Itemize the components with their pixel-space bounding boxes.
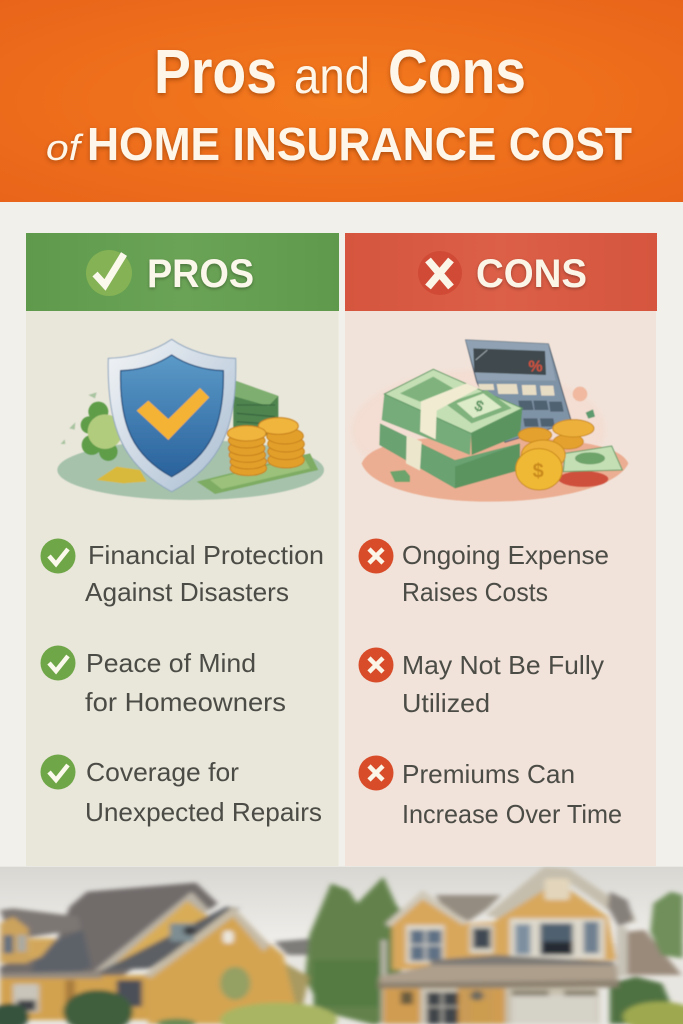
item text: Ongoing Expense — [402, 540, 609, 570]
title: HOME INSURANCE COST — [87, 118, 632, 170]
icon: check — [40, 646, 76, 680]
title: Pros — [154, 38, 277, 107]
icon: pros check badge — [86, 250, 132, 296]
icon: x — [358, 648, 394, 682]
cons heading: CONS — [476, 252, 587, 296]
panel: cons — [345, 233, 657, 866]
pros item 2 — [40, 646, 286, 717]
illustration: money and calculator — [352, 340, 628, 502]
item text: Utilized — [402, 688, 490, 718]
cons panel body — [345, 311, 656, 866]
illustration: money and calculator: % — [528, 359, 543, 376]
pros header bar — [26, 233, 339, 311]
pros item 1 — [40, 538, 324, 607]
item text: for Homeowners — [85, 687, 286, 717]
pros heading: PROS — [147, 252, 254, 296]
icon: x — [358, 538, 394, 574]
illustration: money and calculator: $ — [533, 460, 544, 482]
icon: check — [40, 754, 76, 790]
item text: Against Disasters — [85, 577, 289, 607]
item text: Financial Protection — [88, 540, 324, 570]
bottom stack — [379, 423, 520, 488]
panel: pros — [26, 233, 339, 866]
icon: cons x badge — [418, 251, 462, 295]
icon: check — [40, 538, 76, 574]
item text: Increase Over Time — [402, 799, 622, 829]
item text: May Not Be Fully — [402, 650, 604, 680]
pros panel body — [26, 311, 338, 866]
title: Cons — [388, 38, 526, 107]
illustration: shield and money — [57, 339, 324, 500]
item text: Raises Costs — [402, 577, 548, 607]
item text: Peace of Mind — [86, 648, 256, 678]
title: of — [46, 127, 85, 168]
pros item 3 — [40, 754, 322, 827]
header banner — [0, 0, 683, 202]
item text: Premiums Can — [402, 759, 575, 789]
icon: x — [358, 756, 394, 790]
illustration: money and calculator: $ — [472, 397, 486, 416]
cons item 3 — [358, 756, 622, 829]
item text: Unexpected Repairs — [85, 797, 322, 827]
top stack — [382, 394, 471, 455]
item text: Coverage for — [86, 757, 239, 787]
cons header bar — [345, 233, 657, 311]
photo: suburban houses — [0, 867, 683, 1024]
title: and — [294, 48, 370, 104]
cons item 2 — [358, 648, 604, 718]
title — [46, 38, 632, 170]
cons item 1 — [358, 538, 609, 607]
